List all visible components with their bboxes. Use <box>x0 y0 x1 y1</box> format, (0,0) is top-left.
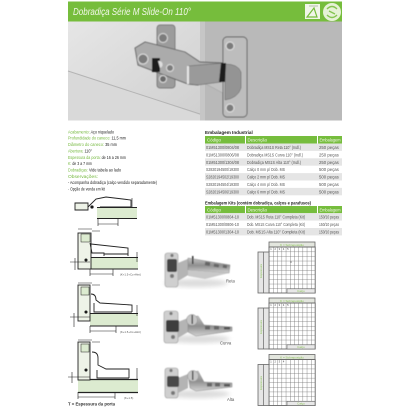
specifications text: Abertura: 110° <box>68 148 92 153</box>
drilling table: Curva: Espessura <box>259 320 263 334</box>
table: industrial packaging: Embalagem <box>320 138 341 142</box>
drilling table: Curva: Calço <box>297 345 305 349</box>
drilling table: Reta: Espessura <box>259 264 263 278</box>
drilling table: Alta <box>258 354 315 406</box>
kit table heading: Embalagem Kits (contém dobradiça, calços e parafusos) <box>205 200 311 206</box>
technical drawing: high arm (Alta) <box>68 340 138 400</box>
table: industrial packaging: Dobradiça MS1S Reta 110° (Indl.) <box>247 145 301 150</box>
label: Alta: Alta <box>227 397 235 402</box>
table: industrial packaging: Dobradiça MS1S Curva 110° (Indl.) <box>247 152 303 157</box>
table: industrial packaging: 01M51300/0804/08 <box>206 145 240 150</box>
table: industrial packaging: 250 peças <box>319 145 339 150</box>
drilling table: Reta: 4 <box>283 247 285 251</box>
specifications text: K: de 3 a 7 mm <box>68 161 92 166</box>
technical drawing: straight arm (Reta) <box>70 229 141 276</box>
hinge photo: Alta <box>165 368 235 402</box>
table: kit packaging: Código <box>207 207 221 212</box>
table: industrial packaging: Calço 6 mm p/ Dob. MS <box>247 189 285 194</box>
table: kit packaging: Embalagem <box>320 207 341 212</box>
icon: slide-on circle <box>323 3 341 21</box>
dimension note: (K+1.5+Cc+Hint) <box>120 272 141 276</box>
table: industrial packaging <box>205 130 342 195</box>
technical drawing: curved arm (Curva) <box>70 283 141 334</box>
drilling table: Alta: K = Sobreposição <box>280 356 304 360</box>
product photo <box>68 22 342 120</box>
specifications text: Espessura da porta: de 16 a 26 mm <box>68 155 126 160</box>
table: industrial packaging: S2820194504/19300 <box>206 182 240 187</box>
table: industrial packaging: 500 peças <box>319 175 339 180</box>
drilling table: Alta: 3 <box>279 360 281 364</box>
table: kit packaging: 150/10 peças <box>319 229 339 234</box>
specifications text: Profundidade do caneco: 11,5 mm <box>68 136 126 141</box>
table: kit packaging: Dob. MS1S Curva 110° Completa (Kit) <box>247 222 305 227</box>
table: kit packaging: 01M51300/0804-10 <box>206 215 240 220</box>
drilling table: Reta <box>258 242 315 293</box>
specifications text: Acabamento: Aço niquelado <box>68 130 114 134</box>
drilling table: Alta: 4 <box>283 360 285 364</box>
icon: opening angle <box>305 4 320 19</box>
technical drawing: open hinge <box>75 197 137 226</box>
drilling table: Curva: K = Sobreposição <box>280 299 304 303</box>
drilling table: Curva: 2 <box>274 303 276 307</box>
table: industrial packaging: 01M51300/0806/08 <box>206 152 240 157</box>
table: industrial packaging: 500 peças <box>319 167 339 172</box>
drilling table: Reta: 2 <box>274 247 276 251</box>
specifications text: - Acompanha dobradiça (calço vendido separadamente) <box>68 180 157 185</box>
label: Curva: Curva <box>220 340 232 346</box>
drilling table: Reta: 1 <box>270 247 272 251</box>
drilling table: Curva: 4 <box>283 303 285 307</box>
specifications text <box>68 130 157 191</box>
table: industrial packaging: 250 peças <box>319 160 339 165</box>
table: industrial packaging: Descrição <box>248 138 268 142</box>
specifications text: - Opção de venda em kit <box>68 186 105 191</box>
footnote: T = Espessura da porta <box>68 402 115 406</box>
hinge photo: Reta <box>164 253 236 287</box>
table: industrial packaging: 01M51300/1304/08 <box>206 160 240 165</box>
label: Reta: Reta <box>226 278 236 284</box>
drilling table: Curva <box>258 298 315 349</box>
dimension note: (K+1.5+Cc+Hint) <box>120 330 141 334</box>
table: industrial packaging: S2820194506/19300 <box>206 189 240 194</box>
table: industrial packaging: Calço 0 mm p/ Dob. MS <box>247 167 285 172</box>
drilling table: Curva: 1 <box>270 303 272 307</box>
table: kit packaging <box>205 200 342 235</box>
drilling table: Alta: Espessura <box>259 376 263 390</box>
drilling table: Curva: 5 <box>287 303 289 307</box>
drilling table: Alta: 1 <box>270 360 272 364</box>
hinge photo: Curva <box>164 311 232 346</box>
specifications text: Dobradiças: Vide tabela ao lado <box>68 168 121 172</box>
drilling table: Reta: Calço <box>297 289 305 293</box>
drilling table: Reta: 3 <box>290 260 292 264</box>
table: industrial packaging: 250 peças <box>319 152 339 157</box>
drilling table: Reta: 5 <box>287 247 289 251</box>
table: industrial packaging: 500 peças <box>319 189 339 194</box>
table: industrial packaging: Calço 4 mm p/ Dob. MS <box>247 182 285 187</box>
table: industrial packaging: Código <box>207 138 221 142</box>
table: kit packaging: 150/10 peças <box>319 215 339 220</box>
table: industrial packaging: S2820194502/19300 <box>206 175 240 180</box>
table: industrial packaging: Calço 2 mm p/ Dob. MS <box>247 175 285 180</box>
table: industrial packaging: 500 peças <box>319 182 339 187</box>
table heading: Embalagem Industrial <box>205 130 253 135</box>
specifications text: Observações: <box>68 174 98 179</box>
drilling table: Curva: 3 <box>279 303 281 307</box>
table: kit packaging: Dob. MS1S Reta 110° Completa (Kit) <box>247 215 305 220</box>
title: Dobradiça Série M Slide-On 110° <box>73 7 191 18</box>
table: industrial packaging: S2820194500/19300 <box>206 167 240 172</box>
dimension note: (K+1.5) <box>124 396 133 400</box>
table: kit packaging: 01M51300/0806-10 <box>206 222 240 227</box>
drilling table: Reta: 3 <box>279 247 281 251</box>
drilling table: Alta: Calço <box>297 402 305 406</box>
table: industrial packaging: Dobradiça MS1S Alta 110° (Indl.) <box>247 160 301 165</box>
drilling table: Reta: K = Sobreposição <box>280 243 304 247</box>
table: kit packaging: 150/10 peças <box>319 222 339 227</box>
title banner <box>68 2 342 22</box>
hinge in photo <box>135 25 247 117</box>
drilling table: Alta: 2 <box>274 360 276 364</box>
table: kit packaging: Descrição <box>248 207 268 212</box>
table: kit packaging: 01M51300/1304-10 <box>206 229 240 234</box>
table: kit packaging: Dob. MS1S Alta 110° Completa (Kit) <box>247 229 305 234</box>
specifications text: Diâmetro do caneco: 35 mm <box>68 142 117 147</box>
